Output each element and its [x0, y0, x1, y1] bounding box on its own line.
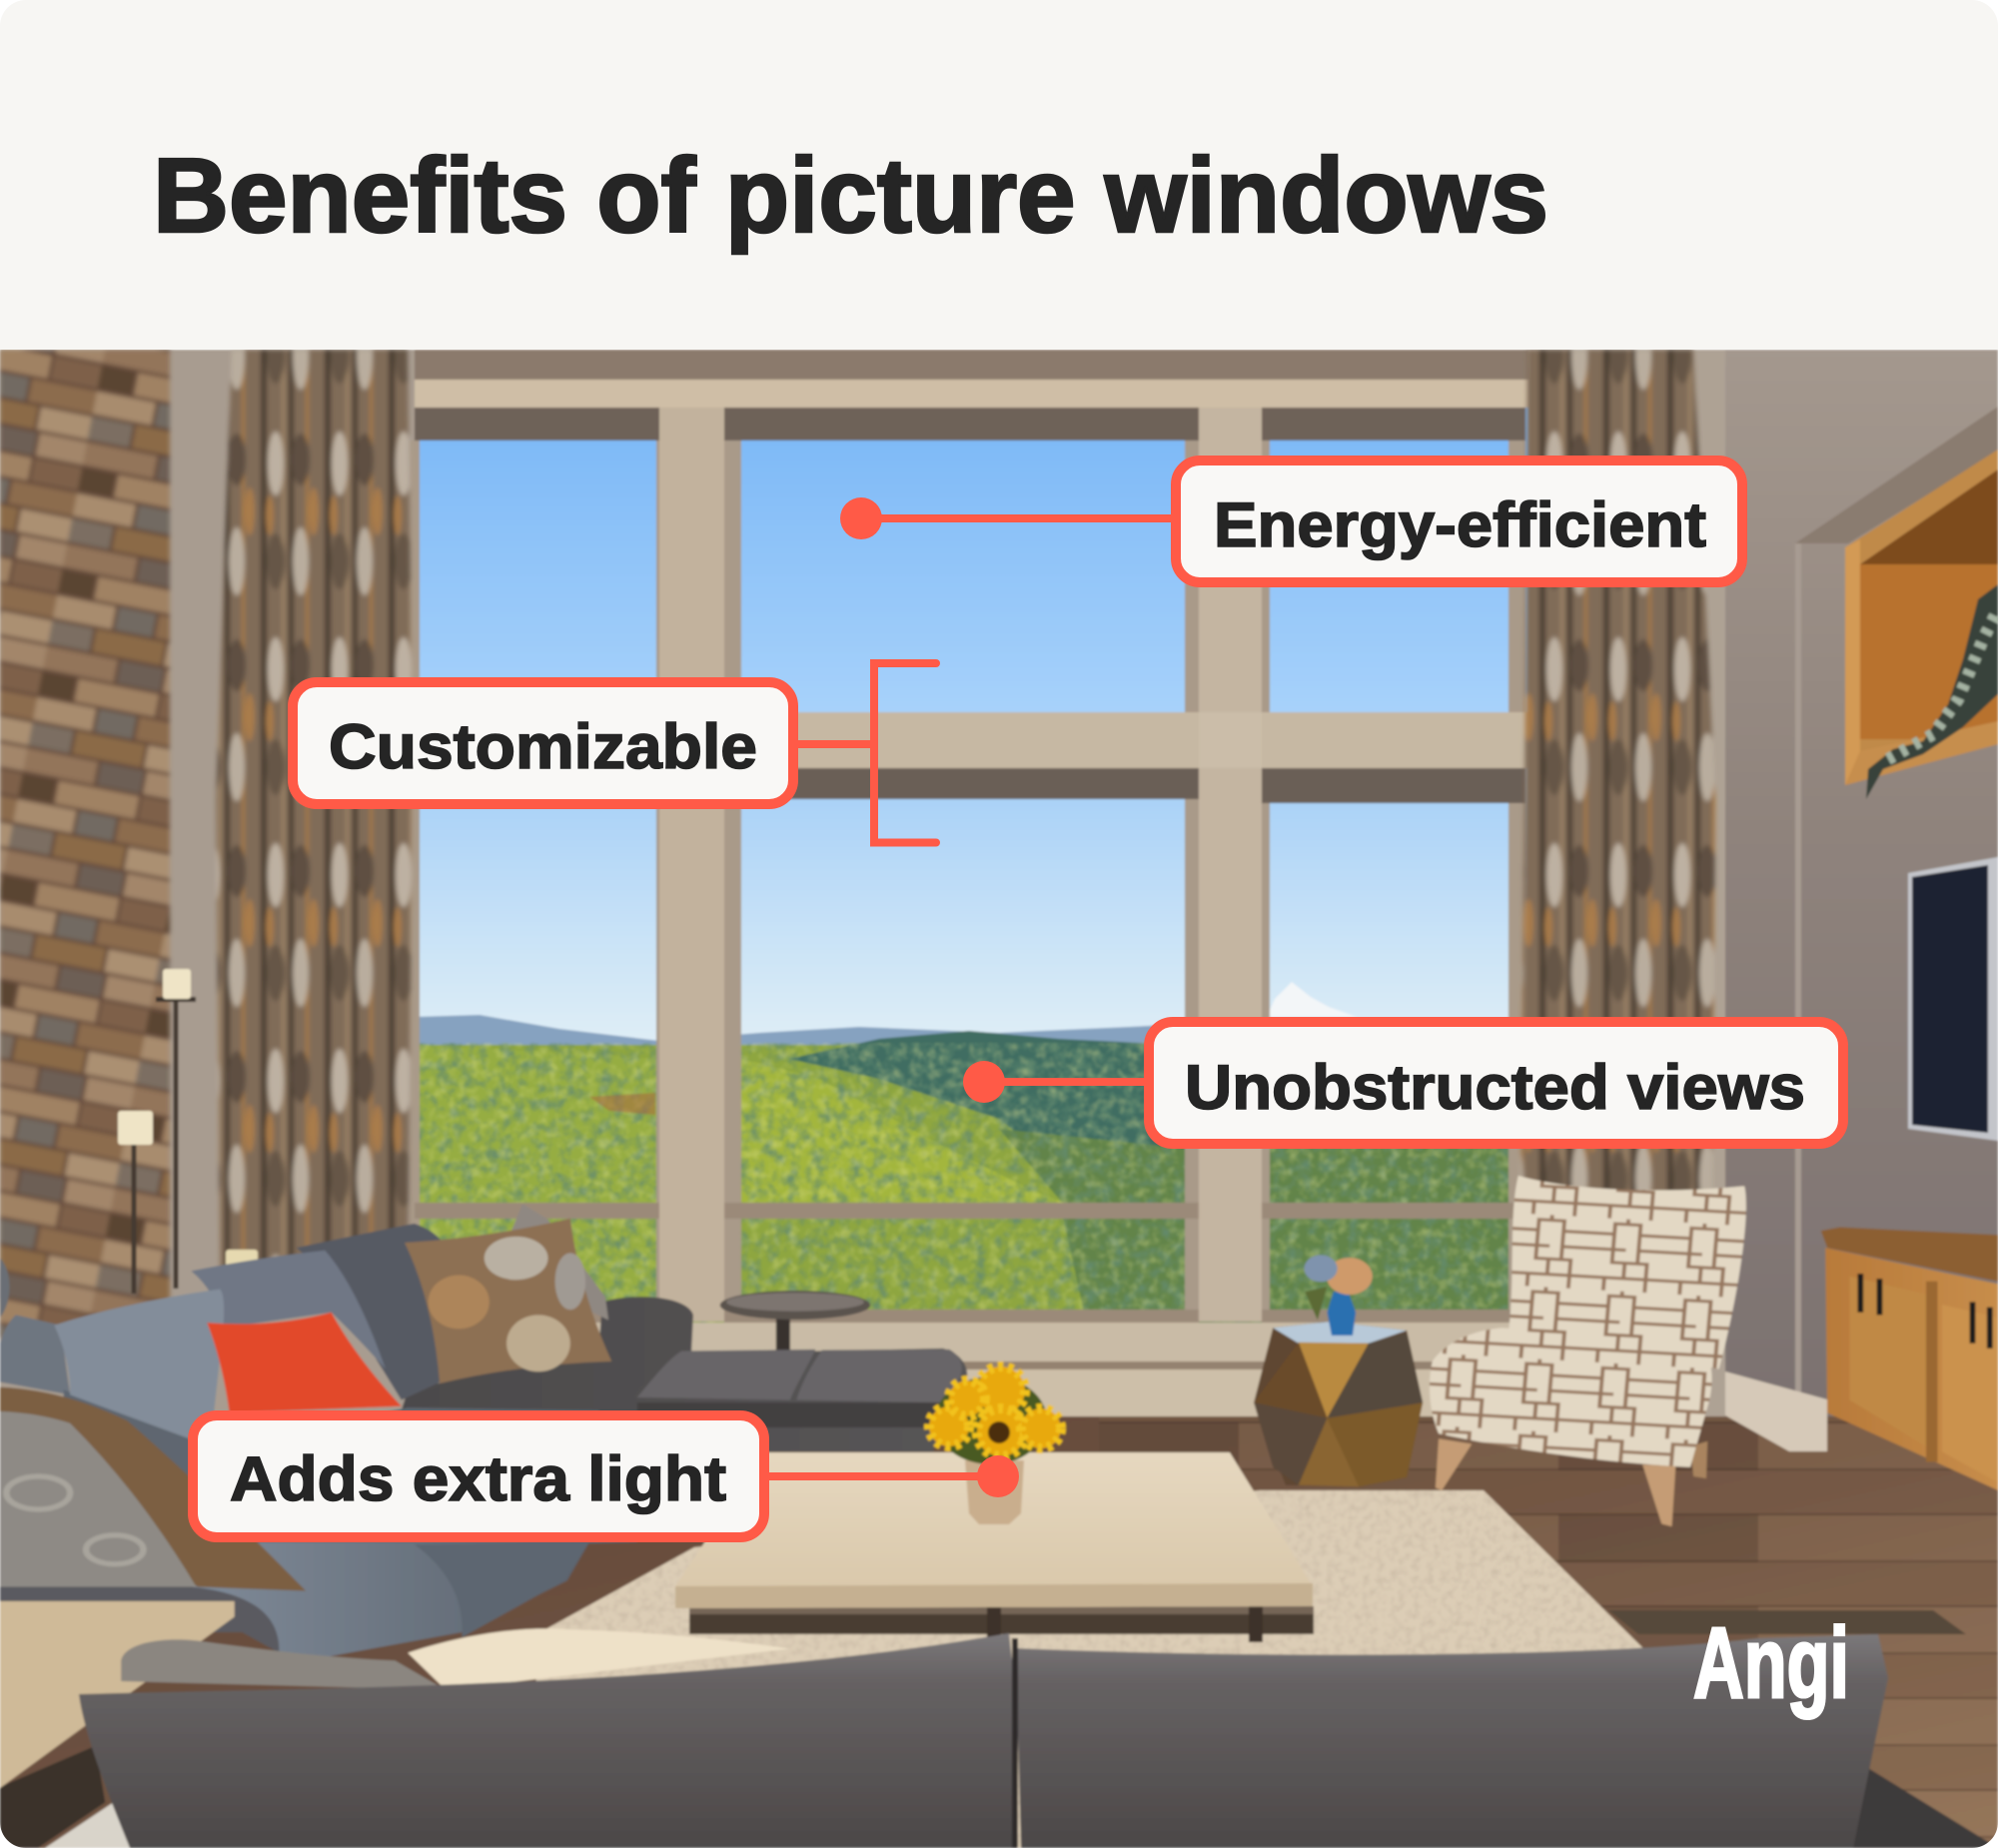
- marker dot and leader: [963, 1061, 1149, 1103]
- callout: Customizable: [293, 663, 936, 843]
- back cushion dark: [297, 1224, 446, 1400]
- roller shades top: [415, 408, 1525, 441]
- left pane hill: [420, 1044, 654, 1296]
- forest base: [436, 1043, 1085, 1324]
- television: [1908, 857, 1998, 1141]
- right cushion: [1015, 1634, 1888, 1848]
- floor: [0, 1416, 1998, 1848]
- tree texture: [415, 1043, 1528, 1333]
- sky lower: [415, 767, 1528, 1067]
- cabinet: [1821, 1228, 1998, 1490]
- callout: Unobstructed views: [963, 1022, 1843, 1144]
- label text: Energy-efficient: [1214, 490, 1706, 560]
- throw blankets: [121, 1628, 790, 1690]
- chaise and right section: [402, 1297, 967, 1451]
- logo: Angi: Angi: [1693, 1607, 1849, 1719]
- distant mountains: [418, 1014, 1153, 1047]
- armchair: [1430, 1176, 1746, 1526]
- label text: Adds extra light: [230, 1444, 726, 1514]
- sectional sofa: [0, 1204, 967, 1664]
- dark far hill: [791, 1029, 1185, 1150]
- trailing plant: [1866, 584, 1998, 799]
- brick wall: [0, 350, 170, 1339]
- picture window view: [415, 408, 1528, 1335]
- candles and stands: [118, 969, 258, 1294]
- baseboard right: [1725, 1372, 1827, 1451]
- red field: [589, 1093, 655, 1115]
- foreground sofa: [79, 1633, 1998, 1848]
- callout: Energy-efficient: [840, 461, 1742, 582]
- curtain left: [216, 350, 413, 1289]
- window frames: [410, 380, 1528, 1418]
- left cushion: [79, 1633, 1015, 1848]
- bright hillside: [741, 1060, 1063, 1203]
- curved sofa corner: [0, 1259, 10, 1318]
- label text: Unobstructed views: [1185, 1053, 1805, 1123]
- marker dot and leader: [767, 1455, 1019, 1497]
- label text: Customizable: [329, 712, 757, 782]
- label box: [1176, 461, 1742, 582]
- back shadow piece: [1843, 1768, 1998, 1848]
- side table and flowers: [1254, 1255, 1423, 1486]
- rug: [500, 1488, 1658, 1848]
- cabinet handles: [1860, 1274, 1990, 1349]
- label box: [293, 682, 793, 804]
- leaf pillow: [405, 1219, 611, 1384]
- sunflower bouquet: [929, 1367, 1061, 1464]
- sky upper: [415, 408, 1528, 717]
- callout: Adds extra light: [193, 1415, 1019, 1537]
- far left cushion: [0, 1315, 70, 1394]
- bracket: [794, 663, 936, 843]
- mid forest: [999, 1129, 1528, 1335]
- marker dot and leader: [840, 497, 1173, 539]
- snow-capped mountain: [1267, 982, 1357, 1017]
- end table: [0, 1601, 235, 1848]
- white floor corner: [45, 1798, 130, 1848]
- header panel: [0, 0, 1998, 350]
- label box: [193, 1415, 764, 1537]
- curtain right: [1520, 350, 1715, 1199]
- coffee table: [675, 1367, 1314, 1642]
- sofa arm: [0, 1587, 279, 1653]
- gray back pillow: [509, 1204, 608, 1320]
- back cushion mid: [191, 1251, 386, 1370]
- wall and ceiling band: [0, 350, 1998, 1448]
- roller shades lower: [790, 767, 1526, 805]
- sash frames: [410, 441, 1525, 1320]
- orange pillow: [207, 1313, 402, 1412]
- wall shelf alcove: [1795, 407, 1998, 799]
- sill and baseboard: [595, 1321, 1510, 1363]
- blue vase: [1327, 1292, 1356, 1336]
- left brown pillow: [0, 1387, 306, 1591]
- flower vase: [965, 1460, 1024, 1524]
- title: Benefits of picture windows: [153, 137, 1548, 255]
- back cushion light: [54, 1290, 224, 1446]
- label box: [1149, 1022, 1843, 1144]
- small round table: [720, 1291, 870, 1351]
- front seat: [191, 1542, 589, 1664]
- left gray pillow: [0, 1411, 196, 1587]
- sofa base behind cushions: [64, 1389, 637, 1554]
